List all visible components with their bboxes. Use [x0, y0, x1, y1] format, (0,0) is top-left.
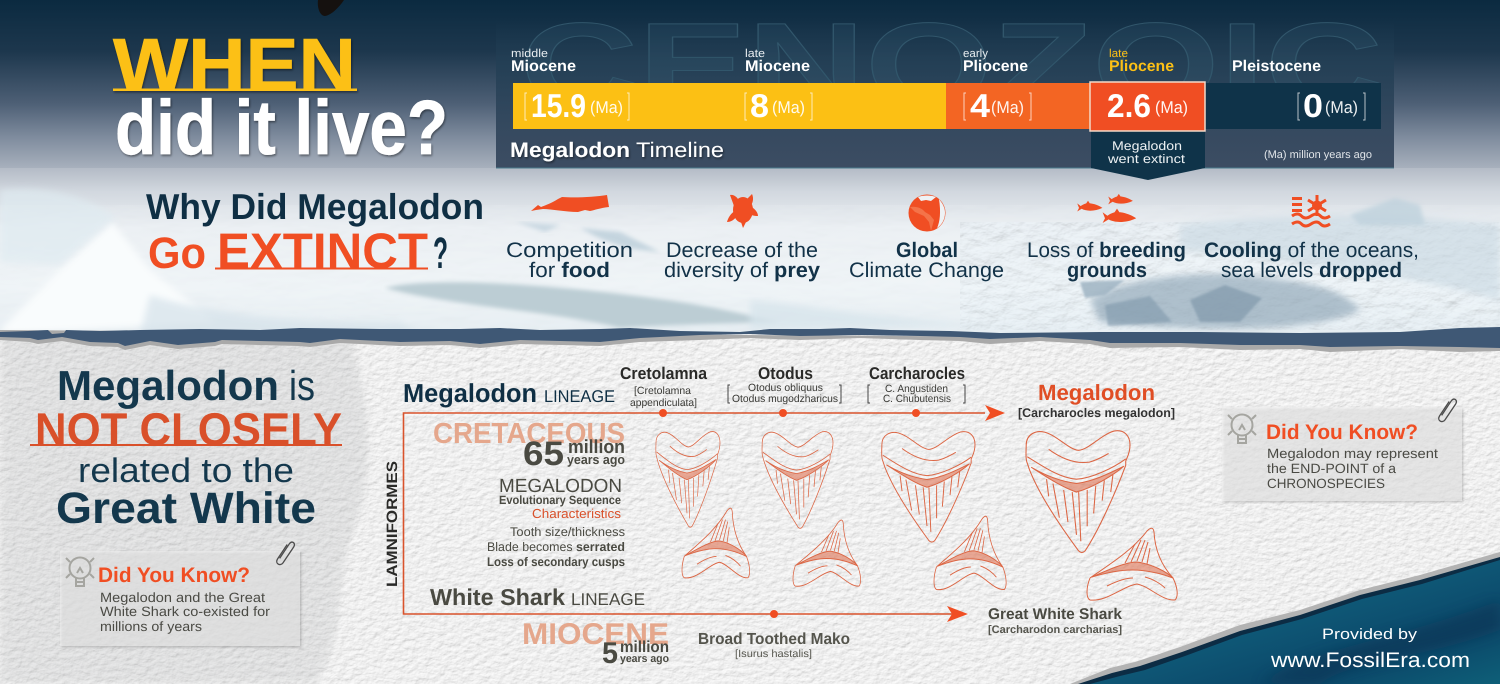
text: evolutionary sequence: Loss of secondary cusps: [487, 555, 625, 569]
cause: loss of breeding grounds: [1027, 239, 1186, 282]
callout: did you know left: millions of years: [100, 619, 202, 634]
era: cretaceous: years ago: [567, 452, 625, 467]
cause: cooling oceans: Cooling of the oceans,: [1204, 239, 1419, 262]
extinction callout: went extinct: [1107, 152, 1186, 166]
callout: did you know left: Megalodon and the Great: [100, 590, 265, 605]
species: cretolamna: Cretolamna: [620, 364, 708, 383]
epoch labels: Pliocene: [1109, 58, 1174, 75]
timeline bar: (Ma): [1325, 98, 1358, 117]
species: broad toothed mako: [698, 631, 850, 660]
species: carcharocles: [868, 364, 965, 405]
timeline bar: (Ma): [772, 98, 805, 117]
tooth: white shark stage two: [793, 520, 861, 586]
sea corner: [1070, 552, 1500, 684]
unit note: (Ma) million years ago: [1264, 149, 1372, 161]
species: great white shark: [988, 606, 1122, 636]
timeline caption: Megalodon: [510, 139, 630, 162]
heading: why extinct: [146, 186, 484, 279]
epoch labels: Miocene: [511, 58, 576, 75]
heading: not closely related: Megalodon: [57, 362, 279, 409]
timeline bar: 15.9: [531, 87, 586, 124]
epoch labels: early: [963, 48, 988, 60]
timeline caption: [510, 139, 724, 162]
credit: Provided by: [1322, 626, 1418, 643]
species: carcharocles: C. Chubutensis: [883, 393, 951, 405]
species: carcharocles: C. Angustiden: [885, 383, 948, 395]
era: miocene: years ago: [620, 653, 669, 665]
icon: cooling oceans: [1292, 195, 1330, 226]
heading: not closely related: Great White: [56, 484, 316, 533]
tooth: cretolamna: [656, 432, 720, 527]
era: miocene: [522, 618, 669, 670]
title: WHEN: [113, 23, 356, 106]
tooth: carcharocles: [882, 432, 975, 542]
timeline caption: Timeline: [636, 139, 724, 162]
era: cretaceous: [433, 418, 625, 473]
cause: loss of breeding grounds: Loss of breeding: [1027, 239, 1186, 262]
species: otodus: Otodus obliquus: [748, 382, 823, 394]
species: broad toothed mako: [Isurus hastalis]: [735, 648, 812, 660]
label: megalodon lineage: [403, 378, 615, 408]
cause: decrease of prey: Decrease of the: [666, 239, 818, 262]
timeline bar: 0: [1303, 87, 1323, 124]
epoch labels: late: [745, 48, 765, 60]
cause: competition for food: Competition: [506, 239, 633, 262]
timeline bar: 4: [970, 87, 991, 124]
callout: did you know right: the END-POINT of a: [1267, 461, 1397, 476]
species: megalodon: Megalodon: [1038, 380, 1155, 405]
callout: did you know right: [1222, 397, 1462, 501]
text: evolutionary sequence: Blade becomes serrated: [487, 540, 625, 554]
species: great white shark: [Carcharodon carcharias]: [988, 624, 1122, 636]
tooth: great white shark: [1087, 528, 1177, 600]
tooth: otodus: [762, 432, 833, 528]
credit: www.FossilEra.com: [1270, 649, 1470, 672]
text: evolutionary sequence: Characteristics: [532, 506, 622, 521]
heading: why extinct: ?: [433, 229, 448, 278]
heading: why extinct: Why Did Megalodon: [146, 186, 484, 227]
credit: [1270, 626, 1470, 672]
species: megalodon: [Carcharocles megalodon]: [1018, 406, 1175, 420]
epoch labels: Pleistocene: [1232, 58, 1321, 75]
cause: competition for food: for food: [529, 259, 610, 282]
callout: did you know left: Did You Know?: [98, 564, 250, 587]
species: megalodon: [1018, 380, 1175, 420]
timeline bar: (Ma): [590, 98, 623, 117]
heading: why extinct: EXTINCT: [217, 223, 428, 279]
species: great white shark: Great White Shark: [988, 606, 1122, 623]
callout: did you know right: CHRONOSPECIES: [1267, 476, 1385, 491]
torn edge: [0, 327, 1500, 352]
era: miocene: million: [620, 639, 669, 656]
timeline bar: 8: [750, 87, 769, 124]
species: cretolamna: [620, 364, 708, 409]
icon: whale: [531, 195, 609, 212]
heading: not closely related: related to the: [78, 452, 294, 490]
timeline bar: [513, 82, 1381, 180]
epoch labels: middle: [511, 48, 548, 60]
background word CENOZOIC: CENOZOIC: [520, 0, 1383, 131]
tooth: megalodon: [1026, 431, 1130, 553]
epoch labels: Miocene: [745, 58, 810, 75]
callout: did you know right: Did You Know?: [1266, 421, 1418, 444]
label: white shark lineage: LINEAGE: [571, 590, 645, 609]
cause: competition for food: [506, 239, 633, 282]
label: lamniformes: LAMNIFORMES: [384, 461, 401, 587]
callout: did you know right: Megalodon may represent: [1267, 446, 1438, 461]
cause: climate change: Climate Change: [849, 259, 1004, 282]
rock silhouette at top edge: [318, 0, 344, 16]
timeline bar: (Ma): [1155, 98, 1188, 117]
species: otodus: Otodus: [758, 364, 813, 383]
label: white shark lineage: [430, 584, 645, 610]
species: broad toothed mako: Broad Toothed Mako: [698, 631, 850, 648]
cause: climate change: [849, 239, 1004, 282]
cause: decrease of prey: [664, 239, 820, 282]
icon: turtle: [727, 194, 758, 228]
text: evolutionary sequence: [487, 476, 625, 569]
cause: cooling oceans: sea levels dropped: [1221, 259, 1402, 282]
heading: not closely related: [30, 362, 342, 533]
label: megalodon lineage: LINEAGE: [544, 387, 615, 406]
panel: sky background: [0, 0, 1500, 172]
lineage chart lines: [404, 405, 1005, 622]
icon: globe: [908, 194, 946, 232]
title: [113, 23, 448, 171]
era: miocene: 5: [602, 637, 618, 670]
callout: did you know left: White Shark co-existed for: [100, 604, 271, 619]
label: white shark lineage: White Shark: [430, 584, 565, 610]
heading: why extinct: Go: [148, 229, 206, 278]
timeline bar: 2.6: [1107, 87, 1151, 124]
epoch labels: [511, 48, 1321, 75]
title: did it live?: [115, 85, 448, 171]
tooth: white shark stage one: [682, 508, 750, 578]
text: evolutionary sequence: Tooth size/thickness: [510, 525, 625, 539]
icon: sharks: [1077, 194, 1136, 223]
era: miocene: MIOCENE: [522, 618, 669, 651]
cause: cooling oceans: [1204, 239, 1419, 282]
epoch labels: Pliocene: [963, 58, 1028, 75]
extinction callout: Megalodon: [1112, 139, 1182, 153]
label: megalodon lineage: Megalodon: [403, 378, 537, 408]
species: carcharocles: Carcharocles: [869, 364, 965, 383]
tooth: white shark stage three: [934, 516, 1006, 590]
epoch labels: late: [1109, 48, 1128, 60]
panel: ice field: [0, 168, 1500, 338]
cause: loss of breeding grounds: grounds: [1067, 259, 1147, 282]
species: cretolamna: appendiculata]: [630, 397, 697, 409]
heading: not closely related: NOT CLOSELY: [35, 403, 342, 455]
timeline bar: (Ma): [991, 98, 1024, 117]
era: cretaceous: 65: [523, 435, 564, 473]
era: cretaceous: CRETACEOUS: [433, 418, 625, 450]
panel: paper background: [0, 334, 1500, 684]
heading: not closely related: is: [289, 362, 315, 409]
panel: timeline: [496, 0, 1394, 180]
text: evolutionary sequence: MEGALODON: [499, 476, 622, 497]
species: otodus: Otodus mugodzharicus: [732, 393, 838, 405]
species: cretolamna: [Cretolamna: [634, 385, 691, 397]
cause: climate change: Global: [896, 239, 958, 262]
cause: decrease of prey: diversity of prey: [664, 259, 820, 282]
extinction callout: [1107, 139, 1186, 166]
species: otodus: [728, 364, 841, 405]
callout: did you know left: [60, 540, 300, 646]
era: cretaceous: million: [568, 437, 625, 458]
text: evolutionary sequence: Evolutionary Sequence: [499, 493, 621, 507]
